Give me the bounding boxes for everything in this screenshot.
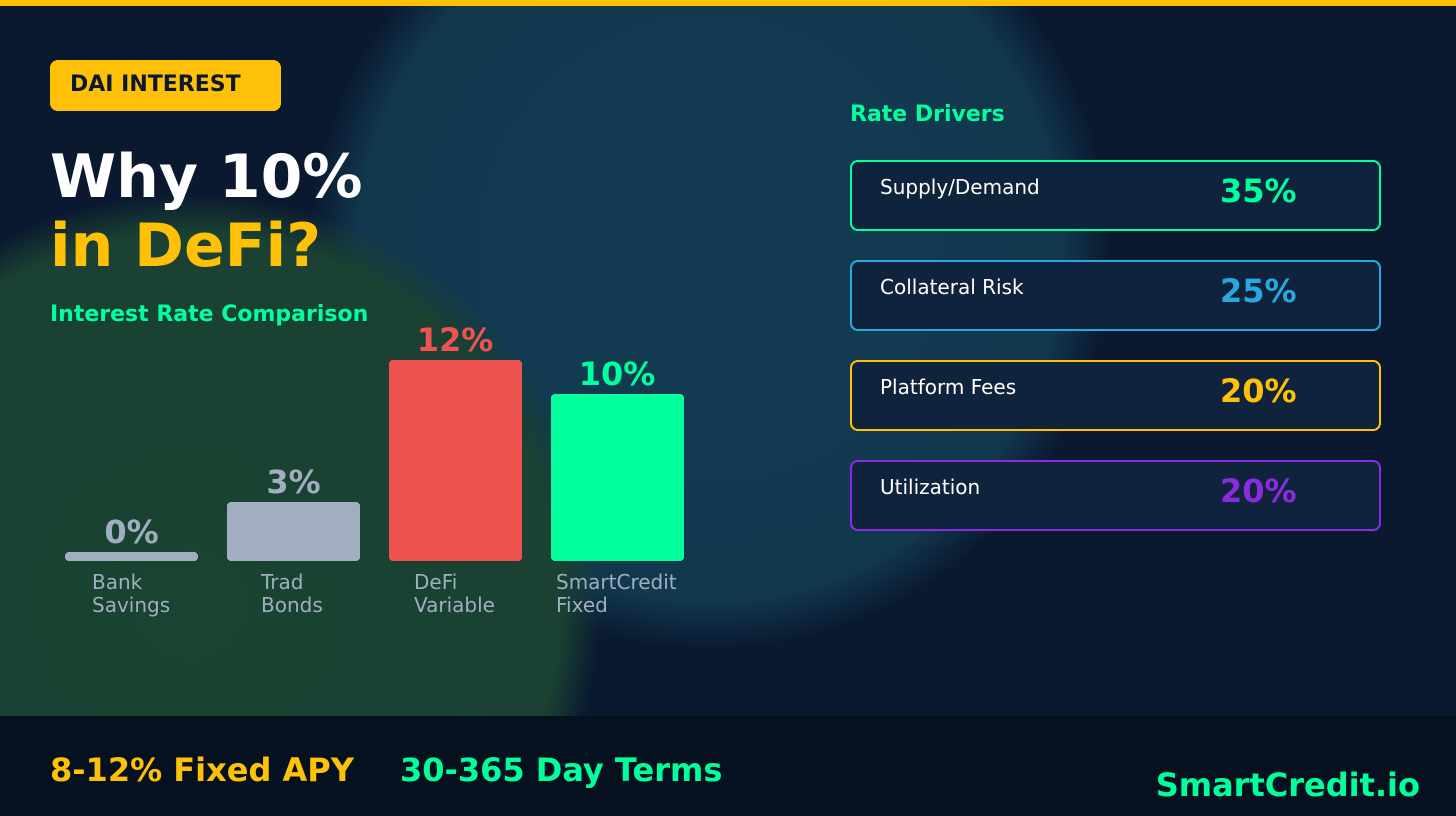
driver card: Collateral Risk: 25% [1220,272,1297,310]
driver card: Supply/Demand: Supply/Demand [880,175,1040,199]
driver card: Platform Fees: 20% [1220,372,1297,410]
chart heading: Interest Rate Comparison [50,302,368,327]
bar: Trad Bonds: Trad [260,570,303,594]
title [50,142,363,281]
title: in DeFi? [50,211,321,281]
bar: SmartCredit Fixed: 10% [579,355,655,393]
bar: SmartCredit Fixed: Fixed [556,593,608,617]
bar: DeFi Variable: DeFi [414,570,457,594]
bar: Bank Savings: Bank [92,570,143,594]
driver card: Utilization [851,461,1380,530]
bar: Trad Bonds [227,463,360,617]
bar: SmartCredit Fixed [551,355,684,617]
bar: DeFi Variable: 12% [417,321,493,359]
badge: DAI INTEREST: DAI INTEREST [70,72,241,97]
bar: Bank Savings: Savings [92,593,170,617]
bar: Trad Bonds: 3% [266,463,321,501]
bar chart [65,321,684,617]
driver card: Platform Fees: Platform Fees [880,375,1016,399]
top accent bar [0,0,1456,6]
drivers heading: Rate Drivers [850,102,1005,127]
driver card: Supply/Demand [851,161,1380,230]
badge: DAI INTEREST [50,60,281,111]
footer stat: APY: 8-12% Fixed APY [50,751,355,789]
bar: DeFi Variable [389,321,522,617]
bar: SmartCredit Fixed: SmartCredit [556,570,677,594]
driver card: Utilization: Utilization [880,475,980,499]
bar: Bank Savings [65,513,198,617]
bar: DeFi Variable: Variable [414,593,495,617]
driver card: Collateral Risk [851,261,1380,330]
footer stat: terms: 30-365 Day Terms [400,751,722,789]
driver card: Collateral Risk: Collateral Risk [880,275,1024,299]
driver card: Platform Fees [851,361,1380,430]
title: Why 10% [50,142,363,212]
driver card: Utilization: 20% [1220,472,1297,510]
footer band [0,716,1456,816]
brand: SmartCredit.io [1156,766,1420,804]
driver card: Supply/Demand: 35% [1220,172,1297,210]
bar: Bank Savings: 0% [104,513,159,551]
bar: Trad Bonds: Bonds [261,593,323,617]
